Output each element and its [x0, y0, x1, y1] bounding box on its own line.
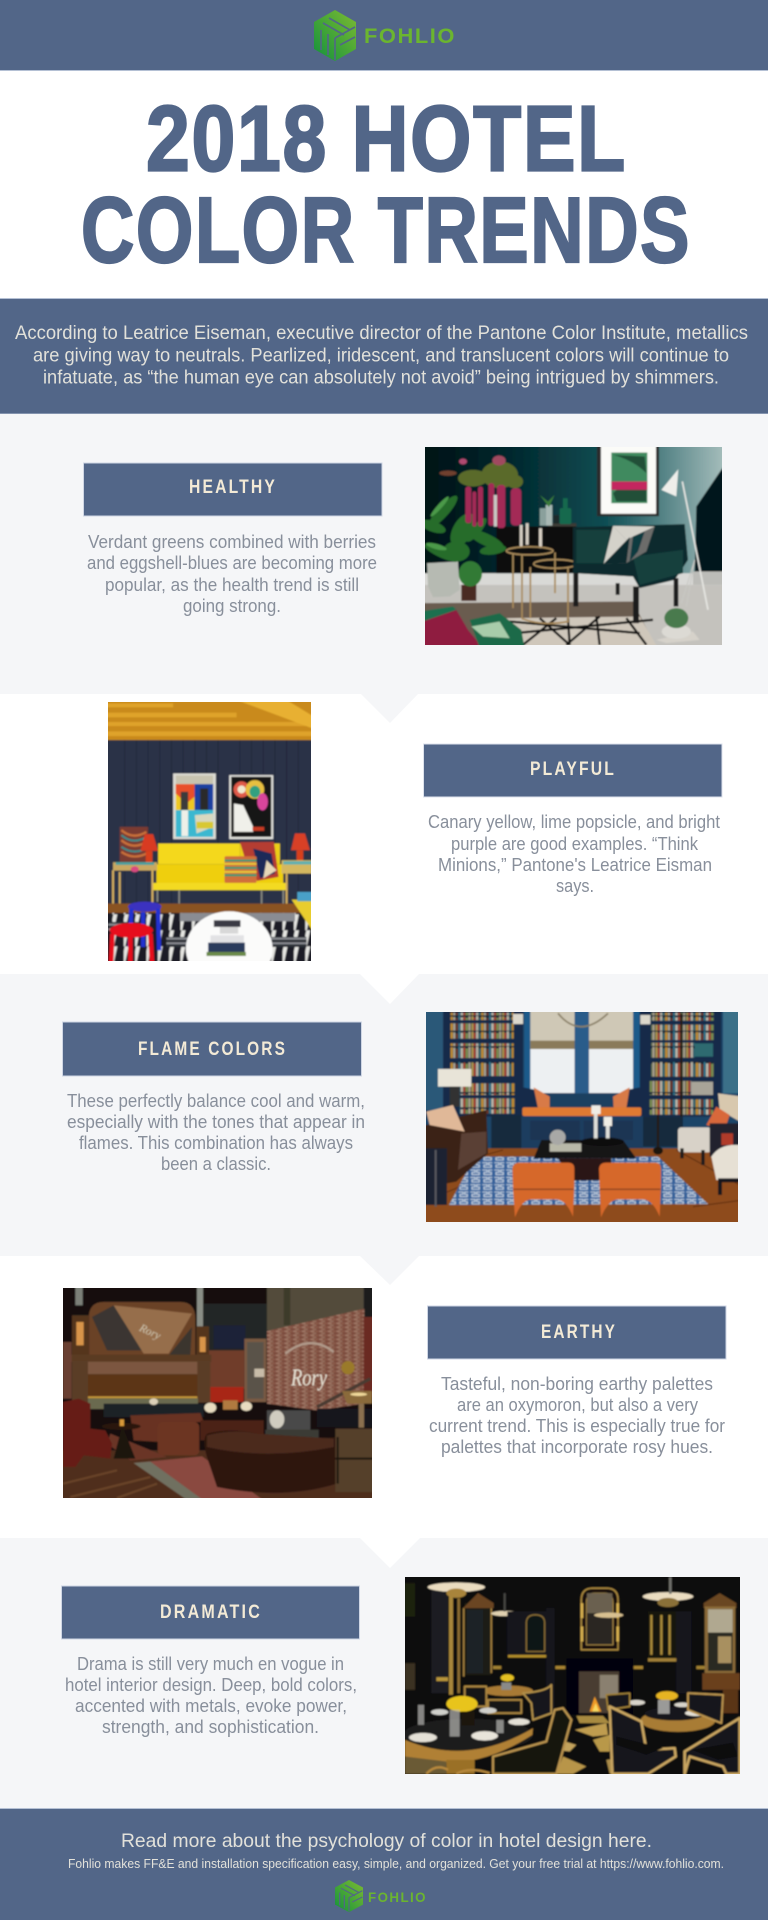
text: healthy [87, 531, 377, 616]
footer logo wordmark: FOHLIO [368, 1889, 427, 1905]
panel: earthy [0, 1256, 768, 1538]
text: dramatic [65, 1653, 357, 1737]
photo: teal living room [425, 447, 722, 645]
title [81, 86, 691, 282]
text: healthy: going strong. [183, 595, 281, 616]
panel: healthy [0, 414, 768, 694]
intro band: infatuate, as “the human eye can absolutely not avoid” being intrigued by shimmers. [43, 366, 719, 388]
heading: dramatic: DRAMATIC [160, 1602, 262, 1623]
footer text: Fohlio makes FF&E and installation specification easy, simple, and organized. Get your free trial at https://www.fohlio.com. [68, 1857, 724, 1871]
vase [427, 562, 460, 597]
heading: flame colors: FLAME COLORS [138, 1039, 287, 1060]
heading: earthy: EARTHY [541, 1322, 617, 1343]
icon: footer Fohlio logo [335, 1880, 363, 1912]
text: playful [428, 811, 720, 896]
footer headline: Read more about the psychology of color in hotel design here. [121, 1830, 652, 1852]
panel: playful [0, 693, 768, 986]
photo: brick lounge: Rory [290, 1364, 327, 1391]
arrow: notch into playful [360, 693, 419, 723]
text: dramatic: Drama is still very much en vogue in [77, 1653, 344, 1674]
photo: brick lounge: Rory [136, 1322, 163, 1343]
text: earthy: are an oxymoron, but also a very [457, 1394, 699, 1415]
arrow: notch into flame colors [360, 974, 419, 1004]
text: dramatic: strength, and sophistication. [102, 1716, 319, 1737]
text: healthy: popular, as the health trend is still [105, 574, 359, 595]
text: flame colors: flames. This combination has always [79, 1132, 353, 1153]
text: playful: says. [556, 875, 594, 896]
footer band [0, 1808, 768, 1920]
photo: black and gold dining room [405, 1577, 740, 1774]
text: dramatic: accented with metals, evoke power, [75, 1695, 347, 1716]
photo: yellow sofa room [108, 702, 311, 961]
panel: flame colors [0, 974, 768, 1257]
title: 2018 HOTEL [146, 86, 627, 190]
intro band: According to Leatrice Eiseman, executive director of the Pantone Color Institute, metallics [15, 322, 748, 344]
text: flame colors: These perfectly balance cool and warm, [67, 1090, 365, 1111]
logo wordmark: FOHLIO [364, 25, 456, 48]
heading: playful [424, 744, 722, 797]
text: earthy: current trend. This is especially true for [429, 1415, 725, 1436]
text: playful: Canary yellow, lime popsicle, and bright [428, 811, 720, 832]
heading: healthy [84, 463, 382, 516]
text: flame colors: been a classic. [161, 1153, 271, 1174]
arrow: notch into dramatic [360, 1538, 420, 1568]
text: healthy: and eggshell-blues are becoming more [87, 552, 377, 573]
text: playful: purple are good examples. “Think [451, 833, 699, 854]
text: flame colors: especially with the tones that appear in [67, 1111, 365, 1132]
intro band [0, 298, 768, 414]
heading: healthy: HEALTHY [189, 477, 277, 498]
icon: Fohlio logo [314, 10, 356, 61]
photo: brick lounge [63, 1288, 372, 1498]
text: earthy: palettes that incorporate rosy hues. [441, 1436, 713, 1457]
heading: playful: PLAYFUL [530, 759, 616, 780]
text: flame colors [67, 1090, 365, 1174]
heading: earthy [428, 1306, 726, 1359]
photo: blue library lounge [426, 1012, 738, 1222]
heading: dramatic [62, 1586, 360, 1639]
text: earthy [429, 1373, 725, 1457]
intro band: are giving way to neutrals. Pearlized, iridescent, and translucent colors will continue to [33, 344, 729, 366]
panel: dramatic [0, 1538, 768, 1808]
top header band [0, 0, 768, 71]
text: earthy: Tasteful, non-boring earthy palettes [441, 1373, 713, 1394]
text: playful: Minions,” Pantone's Leatrice Eisman [438, 854, 712, 875]
text: dramatic: hotel interior design. Deep, bold colors, [65, 1674, 357, 1695]
flower stems [458, 462, 523, 488]
heading: flame colors [62, 1022, 362, 1076]
arrow: notch into earthy [360, 1256, 419, 1285]
text: healthy: Verdant greens combined with berries [88, 531, 376, 552]
